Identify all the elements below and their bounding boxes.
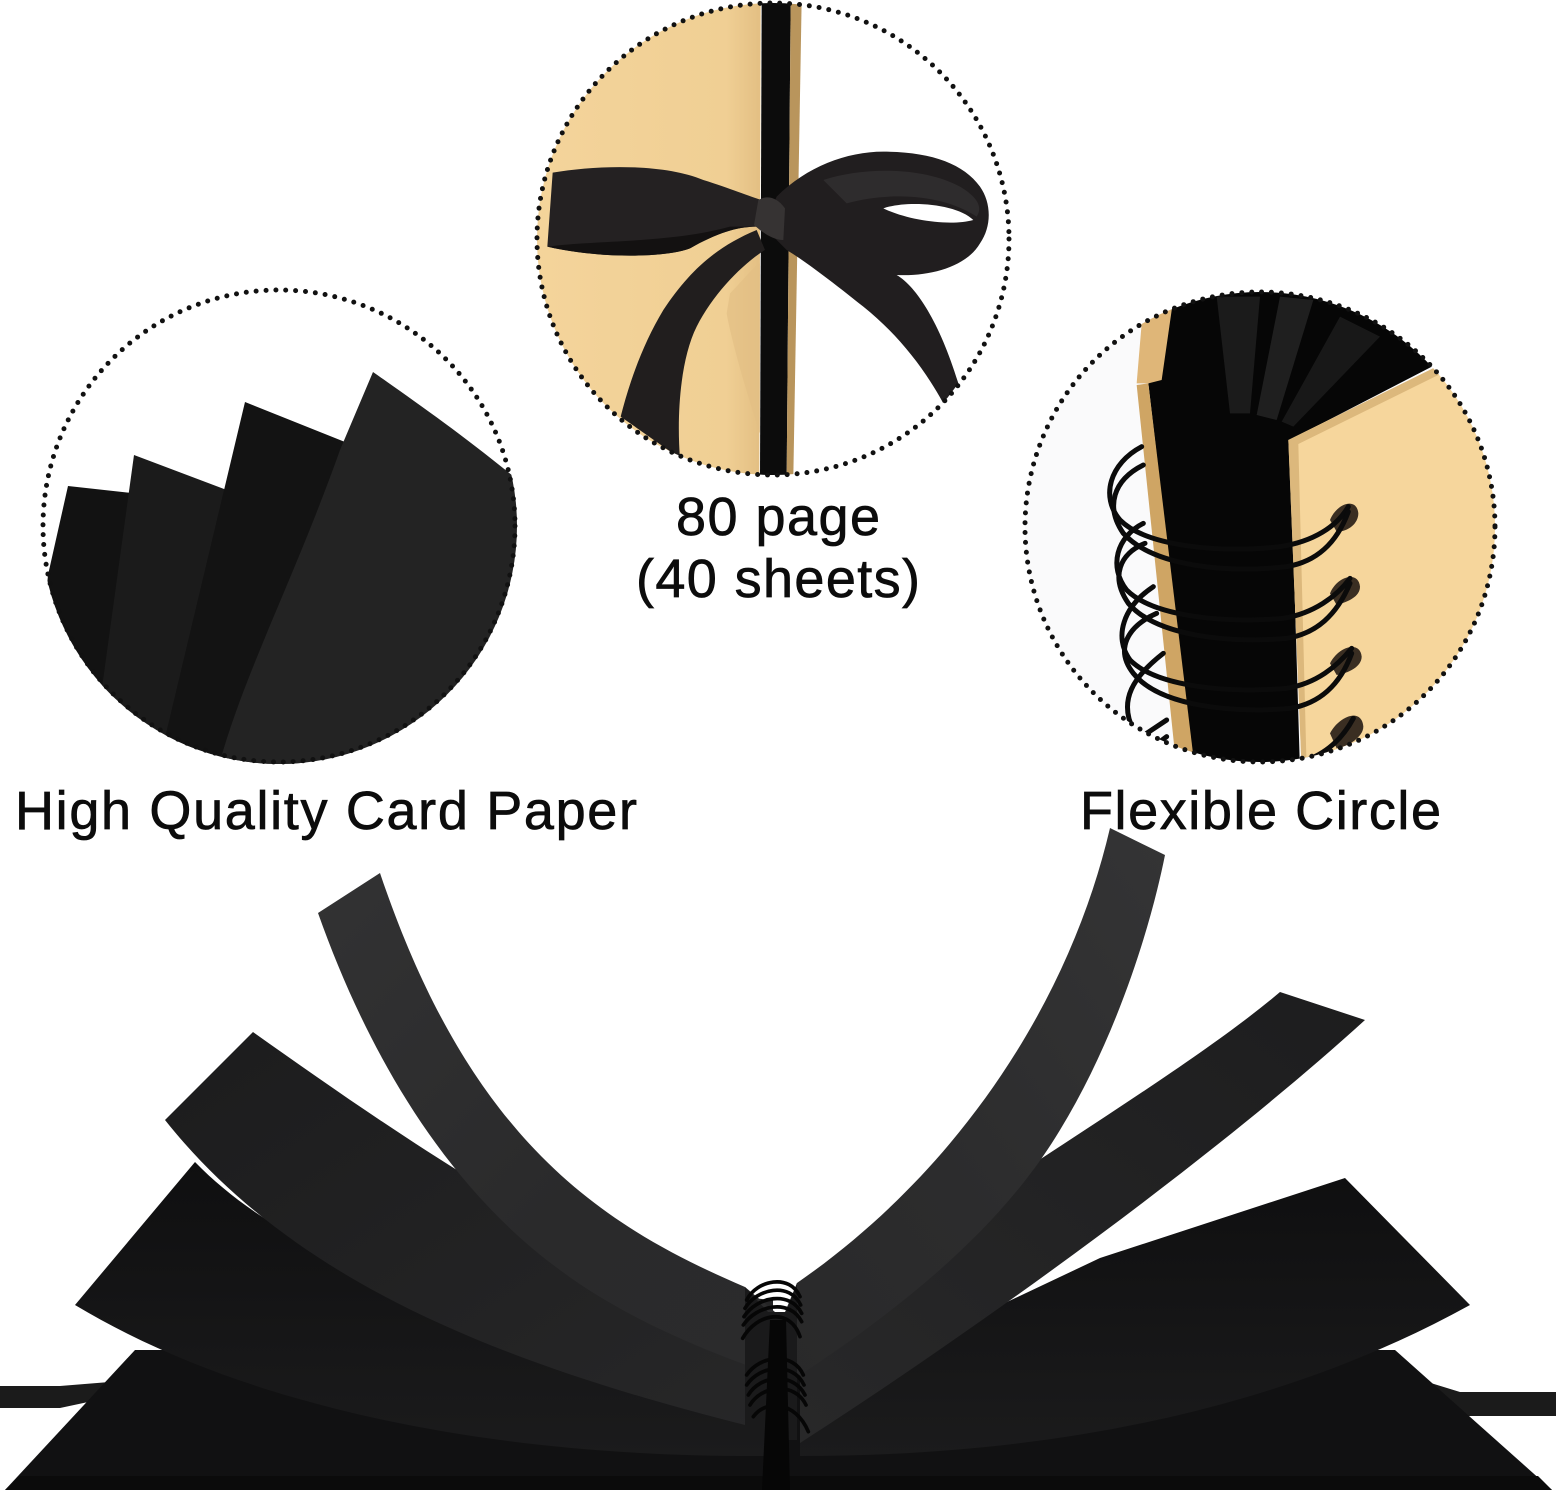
ribbon knot [754,197,785,240]
back cover gold top [1137,303,1173,383]
bottom cover [5,1350,1552,1490]
sheet two [102,455,224,748]
circle: card paper detail [30,372,530,780]
gold spine strip [1137,383,1195,770]
right middle page [800,992,1365,1443]
circle outline: ribbon closure [537,3,1009,475]
left loop shade [547,227,757,256]
sheet four front [215,372,530,780]
ribbon right [1395,1372,1556,1416]
ribbon tail left [621,230,765,458]
open album with fanned pages [0,828,1556,1490]
sheet one [48,486,129,700]
right tall page [785,828,1165,1385]
circle outline: spiral binding [1025,292,1495,762]
upper ring group [743,1282,802,1338]
lower ring group [747,1359,808,1432]
cover edge [1288,367,1442,770]
gold cover [530,0,761,477]
bottom cover band [5,1476,1552,1490]
left tall page [318,873,775,1375]
label: high quality card paper: High Quality Card Paper [15,781,637,841]
label: 80 page: 80 page [676,487,880,547]
circle: spiral binding detail [1107,292,1495,762]
front gold cover [1288,367,1500,770]
lower left page [75,1162,770,1456]
soft shadow under ribbon [727,263,760,433]
ribbon left [0,1380,135,1408]
page fan streaks [1217,297,1260,413]
ribbon bow right [763,152,989,403]
black page block [1148,290,1435,770]
spine backing [745,1283,797,1440]
label: 40 sheets: (40 sheets) [636,549,920,609]
background tint [1020,290,1500,770]
spine [762,1320,790,1490]
black spine stripe [760,0,791,477]
circle outline: card paper [43,290,515,762]
binding holes [1330,504,1358,532]
bow highlight [823,171,979,217]
lower right page [800,1178,1470,1456]
gold edge strip [787,0,802,477]
sheet three [166,402,344,764]
circle: ribbon closure detail [530,0,989,477]
ribbon bow left [547,167,762,256]
label: flexible circle: Flexible Circle [1080,781,1441,841]
spiral rings [1110,447,1353,766]
left middle page [165,1032,773,1432]
